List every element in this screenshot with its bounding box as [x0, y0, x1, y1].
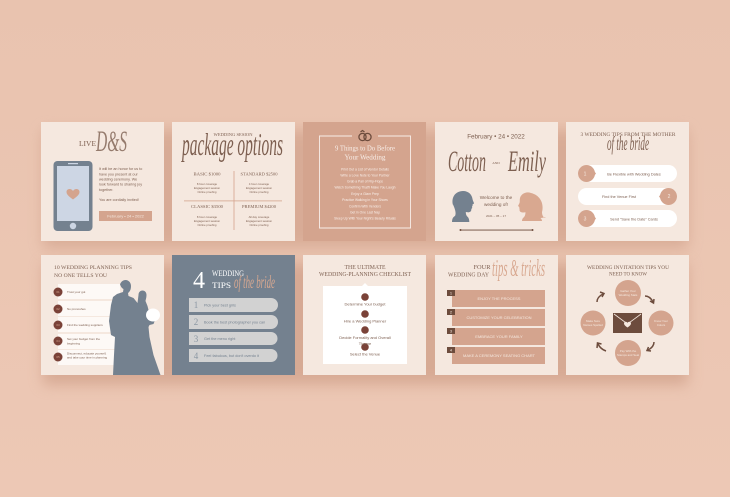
panel: 10 wedding planning tips — [41, 255, 164, 375]
tip numbers — [194, 300, 199, 361]
panel: wedding day tips and tricks: 3 — [450, 328, 453, 334]
circle labels: Colors — [657, 323, 666, 327]
circle labels: Pay With the — [620, 349, 637, 353]
icon: bride silhouette — [518, 192, 546, 221]
arrows: cycle — [597, 292, 654, 351]
tip labels: Set your budget from the — [67, 337, 100, 341]
script names: Cotton — [448, 145, 486, 178]
date: February • 24 • 2022 — [467, 134, 525, 140]
package: basic: 8 hour coverage — [197, 182, 218, 186]
tip labels: Find the wedding suppliers — [67, 323, 103, 327]
package: premium — [242, 204, 277, 227]
number badges — [54, 288, 62, 362]
package: standard: 4 hour coverage — [249, 182, 270, 186]
tip labels: Trust your gut — [67, 290, 86, 294]
heading: 4 — [193, 268, 205, 294]
illustration: couple silhouette — [109, 280, 160, 375]
panel: Cotton and Emily — [435, 122, 558, 241]
heading: 9 things — [335, 144, 395, 162]
checklist labels: Decide Formality and Overall — [339, 335, 391, 340]
heading: 9 things: Your Wedding — [344, 154, 386, 162]
white frame — [320, 136, 410, 228]
tip labels — [67, 290, 107, 360]
package: basic: BASIC $1000 — [194, 172, 221, 176]
checklist text: Get in One Last Nap — [350, 210, 380, 214]
panel: 10 wedding planning tips: 01 — [56, 290, 60, 294]
heading: 3 WEDDING TIPS FROM THE MOTHER — [580, 133, 676, 138]
panel: package options — [172, 122, 295, 241]
heading — [319, 265, 411, 278]
divider lines — [184, 171, 282, 230]
circle labels — [583, 289, 668, 357]
text: invitation message: It will be an honor for us to — [99, 167, 142, 171]
tip 1: 1 — [584, 172, 587, 178]
panel: wedding day tips and tricks: tips & tricks — [492, 256, 545, 282]
package: classic — [191, 204, 224, 227]
panel: wedding invitation tips — [566, 255, 689, 375]
bar labels — [463, 296, 536, 358]
circle labels: Stamps and Seal — [617, 353, 639, 357]
white checklist card — [323, 283, 407, 364]
text: invitation message: have you present at our — [99, 172, 139, 176]
panel: 10 wedding planning tips: 02 — [56, 307, 60, 311]
circle labels: Make Sure — [586, 319, 600, 323]
heading: NO ONE TELLS YOU — [54, 273, 107, 279]
checklist labels — [339, 302, 391, 356]
package: classic: CLASSIC $3500 — [191, 204, 224, 209]
checklist labels: Determine Your budget — [345, 302, 386, 306]
package: basic: Engagement session — [194, 186, 221, 190]
panel: 9 things to do — [303, 122, 426, 241]
circle labels: Wedding Stats — [619, 293, 638, 297]
package: premium: PREMIUM $4200 — [242, 204, 277, 209]
tip labels: Get the menu right — [204, 337, 236, 341]
tip labels: Book the best photographer you can — [204, 320, 265, 324]
checklist text — [334, 168, 396, 220]
package: classic: 8 hour coverage — [197, 215, 218, 219]
panel: ultimate checklist — [303, 255, 426, 375]
checklist text: Practice Walking in Your Shoes — [342, 198, 388, 202]
tip labels: Pick your best girls — [204, 304, 236, 308]
tip labels — [204, 304, 265, 358]
tip rows — [58, 284, 120, 365]
welcome message — [480, 195, 513, 218]
panel: 10 wedding planning tips: 03 — [56, 323, 60, 327]
heading: WEDDING-PLANNING CHECKLIST — [319, 272, 411, 278]
tip labels: and take your time in planning — [67, 356, 107, 360]
heading: WEDDING INVITATION TIPS YOU — [587, 265, 669, 271]
tip 3: 3 — [584, 216, 587, 222]
welcome message: Welcome to the — [480, 195, 513, 200]
heading — [54, 265, 132, 279]
tip numbers: 4 — [194, 351, 199, 361]
tip labels: No pronoshes — [67, 307, 86, 311]
heading: WEDDING — [212, 268, 244, 278]
panel: package options: package options — [181, 126, 283, 162]
text: invitation message — [99, 167, 142, 202]
heading: live D&S: D&S — [95, 125, 127, 158]
checklist text: Write a Love Note to Your Partner — [340, 174, 391, 178]
circle labels: Know Your — [654, 319, 668, 323]
package: standard: Online proofing — [250, 190, 269, 194]
date button: February • 24 • 2022 — [107, 214, 145, 218]
tip 3 — [578, 210, 677, 227]
text: invitation message: together. — [99, 188, 113, 192]
panel: 4 wedding tips of the bride — [172, 255, 295, 375]
package: basic — [194, 172, 221, 194]
tip numbers: 1 — [194, 300, 198, 310]
panel: wedding day tips and tricks — [435, 255, 558, 375]
panel: wedding day tips and tricks: 1 — [450, 290, 453, 296]
panel: tips from the mother of the bride — [566, 122, 689, 241]
heading: FOUR — [474, 265, 490, 271]
panel: 10 wedding planning tips: 04 — [56, 339, 60, 343]
circle labels: Names Spelled — [583, 323, 603, 327]
icon: groom silhouette — [452, 191, 474, 222]
number tags — [447, 290, 455, 353]
tip 3: Send "Save the Date" Cards — [610, 218, 658, 222]
heading: live D&S — [79, 125, 127, 158]
checklist text: Watch Something That'll Make You Laugh — [335, 186, 396, 190]
checklist labels: Select the Venue — [350, 352, 381, 356]
tip pills — [189, 298, 278, 362]
checklist labels: Hire a Wedding Planner — [344, 318, 387, 324]
panel: tips from the mother of the bride: of the bride — [607, 133, 649, 155]
tip 2 — [578, 188, 677, 205]
panel: wedding day tips and tricks: 4 — [450, 348, 453, 352]
package: classic: Online proofing — [198, 223, 217, 227]
package: premium: Online proofing — [250, 223, 269, 227]
circle labels: Gather Your — [620, 289, 636, 293]
welcome message: 2021 – 05 – 17 — [486, 214, 506, 218]
icon: wedding rings — [359, 130, 371, 141]
text: invitation message: You are cordially invited! — [99, 198, 139, 202]
tip circles — [580, 280, 674, 366]
heading: 10 WEDDING PLANNING TIPS — [54, 265, 132, 271]
text: invitation message: wedding ceremony. We — [99, 178, 137, 182]
tip numbers: 3 — [194, 334, 199, 344]
script names: AND — [492, 161, 500, 165]
package: standard: Engagement session — [246, 186, 273, 190]
bar labels: CUSTOMIZE YOUR CELEBRATION — [466, 315, 532, 320]
package: premium: Engagement session — [246, 219, 273, 223]
package: classic: Engagement session — [194, 219, 221, 223]
heading: THE ULTIMATE — [344, 265, 386, 271]
checklist labels: Theme — [359, 341, 372, 346]
heading: wedding session: WEDDING SESION — [214, 132, 253, 137]
heading: live D&S: LIVE — [79, 139, 96, 148]
text: invitation message: look forward to sharing joy — [99, 182, 142, 186]
icon: envelope — [613, 313, 642, 333]
heading: TIPS — [212, 280, 231, 290]
tip labels: Disconnect, educate yourself, — [67, 352, 107, 356]
script names: Emily — [507, 145, 546, 178]
bar labels: MAKE A CEREMONY SEATING CHART — [463, 353, 536, 358]
tip numbers: 2 — [194, 317, 198, 327]
package: basic: Online proofing — [198, 190, 217, 194]
welcome message: wedding of! — [484, 202, 508, 207]
bar labels: EMBRACE YOUR FAMILY — [475, 334, 523, 339]
tip 2: 2 — [668, 194, 671, 200]
tip labels: beginning — [67, 342, 80, 346]
checklist text: Enjoy a Glam Prep — [351, 192, 379, 196]
heading — [193, 268, 244, 294]
bars — [452, 290, 545, 364]
heading: 9 things: 9 Things to Do Before — [335, 144, 395, 152]
checklist text: Grab a Pair of Flip-Flops — [347, 180, 383, 184]
bouquet — [146, 308, 160, 322]
panel: live D&S invitation — [41, 122, 164, 241]
panel: 10 wedding planning tips: 05 — [56, 355, 60, 359]
bar labels: ENJOY THE PROCESS — [478, 296, 521, 301]
number badges — [361, 293, 369, 351]
package: premium: All day coverage — [249, 215, 270, 219]
panel: 4 wedding tips of the bride: of the bride — [234, 272, 275, 292]
checklist text: Print Out a List of Vendor Details — [341, 168, 389, 172]
package: standard — [240, 172, 278, 194]
timeline line — [460, 229, 534, 231]
heading: NEED TO KNOW — [609, 272, 648, 278]
tip labels: Feel fabulous, but don't overdo it — [204, 354, 260, 358]
tip 1 — [578, 165, 677, 182]
checklist text: Confirm With Vendors — [349, 204, 381, 208]
icon: phone with heart — [54, 161, 92, 231]
tip 2: Find the Venue First — [602, 195, 637, 199]
heading — [587, 265, 669, 278]
tip 1: Be Flexible with Wedding Dates — [607, 172, 661, 176]
checklist text: Sleep Up With Your Night's Beauty Rituals — [334, 216, 396, 220]
heading: WEDDING DAY — [448, 272, 490, 278]
package: standard: STANDARD $2500 — [240, 172, 278, 176]
panel: wedding day tips and tricks: 2 — [450, 310, 453, 314]
heading — [448, 265, 490, 278]
